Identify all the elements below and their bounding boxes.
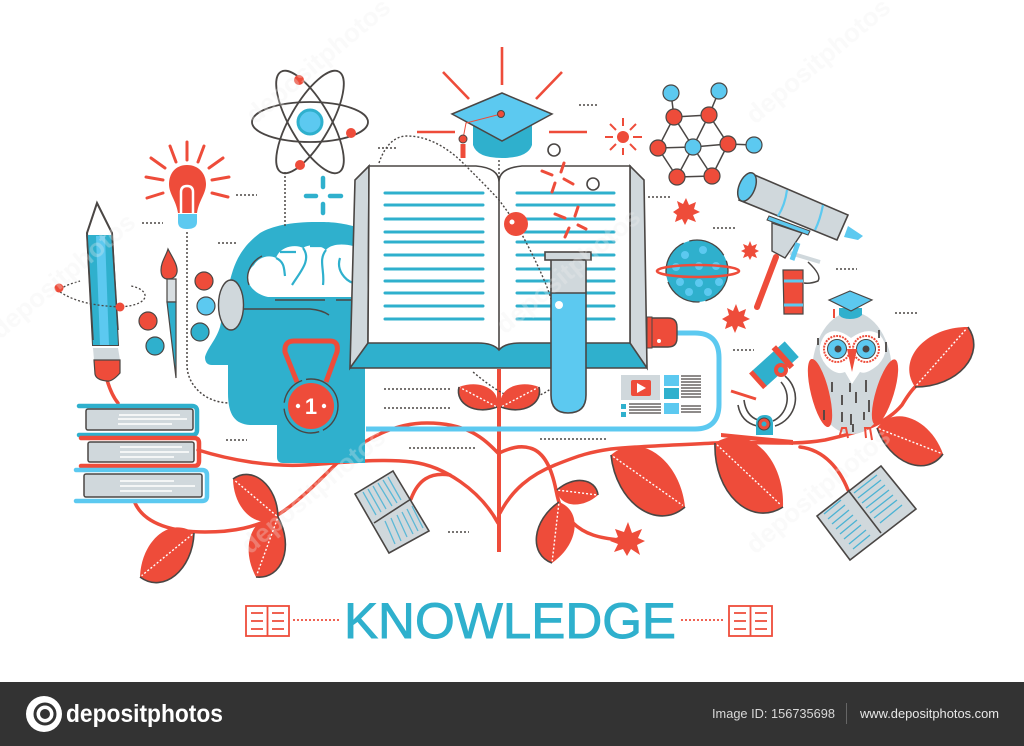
footer bar: www.depositphotos.com bbox=[859, 707, 999, 721]
watermarks: depositphotos bbox=[235, 421, 391, 560]
coloured dots bbox=[139, 272, 215, 355]
title: KNOWLEDGE bbox=[344, 593, 676, 649]
dotted line right bbox=[681, 619, 725, 621]
glasses bbox=[218, 280, 244, 330]
panel: open book bbox=[350, 166, 647, 368]
icon: red stars bbox=[673, 198, 759, 333]
leaves bbox=[127, 311, 986, 593]
video panel bbox=[621, 375, 701, 417]
logo bbox=[26, 696, 62, 732]
stack of books bbox=[76, 406, 207, 501]
bottom star on vine bbox=[610, 522, 645, 556]
icon: graduation cap bbox=[417, 47, 587, 180]
medal: 1 bbox=[305, 394, 317, 419]
icon: test tube bbox=[545, 252, 591, 413]
icon: title book left bbox=[246, 606, 289, 636]
icon: microscope bbox=[721, 339, 801, 445]
owl cap bbox=[829, 291, 872, 319]
icon: atom bbox=[252, 62, 368, 226]
book text lines bbox=[385, 193, 614, 319]
dotted line left bbox=[293, 619, 339, 621]
icon: ringed planet bbox=[657, 240, 739, 302]
icon: light bulb bbox=[146, 142, 229, 229]
icon: sun bbox=[605, 118, 642, 155]
brain bbox=[248, 245, 353, 300]
dotted trajectory with red ball bbox=[379, 136, 560, 399]
orbit around pencil bbox=[54, 281, 145, 312]
icon: title book right bbox=[729, 606, 772, 636]
small circles and sparks bbox=[542, 144, 599, 237]
small open book right bbox=[817, 466, 916, 560]
decorative vines bbox=[107, 369, 915, 552]
footer bar: Image ID: 156735698 bbox=[712, 707, 835, 721]
icon: telescope bbox=[734, 170, 863, 314]
icon: blue plus bbox=[306, 178, 341, 213]
icon: paintbrush bbox=[161, 249, 177, 378]
icon: owl bbox=[803, 291, 904, 440]
panel: head silhouette bbox=[205, 222, 365, 463]
medal bbox=[284, 341, 338, 433]
dotted caption lines bbox=[142, 105, 917, 532]
icon: red plug bbox=[647, 317, 677, 348]
watermarks: depositphotos bbox=[740, 421, 896, 560]
footer bar bbox=[0, 682, 1024, 746]
small open book left bbox=[355, 471, 429, 553]
watermarks: depositphotos bbox=[490, 201, 646, 340]
footer bar: depositphotos bbox=[66, 700, 223, 728]
icon: pencil bbox=[87, 203, 120, 381]
icon: molecule bbox=[650, 83, 762, 185]
watermarks bbox=[0, 0, 896, 560]
dotted line from bulb to head bbox=[187, 232, 230, 403]
blue connector pipe bbox=[366, 333, 719, 429]
